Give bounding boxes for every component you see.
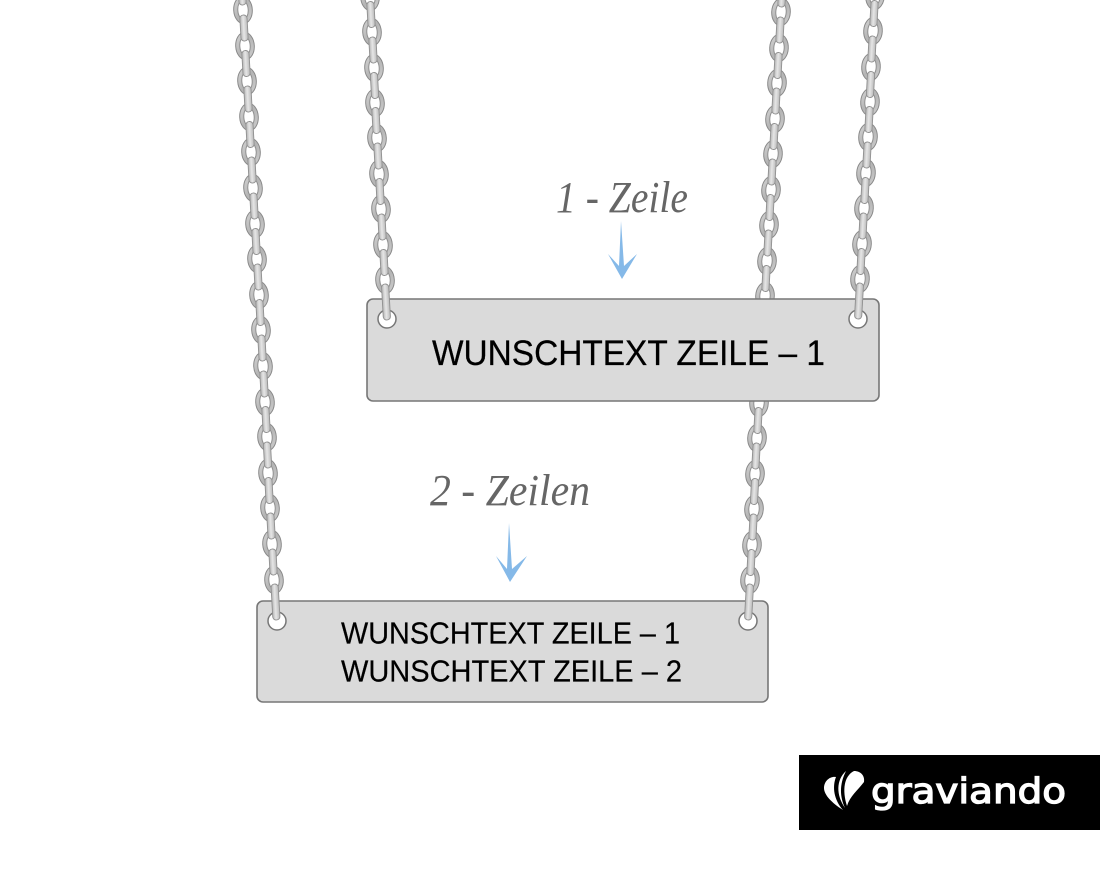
chain: short right strand <box>850 0 885 293</box>
arrow: to two-line pendant <box>496 523 527 582</box>
panel: two-line bar pendant: WUNSCHTEXT ZEILE – 2 <box>341 654 682 688</box>
panel: two-line bar pendant: WUNSCHTEXT ZEILE – 1 <box>341 616 680 650</box>
logo: graviando <box>799 755 1100 830</box>
arrow: to one-line pendant <box>608 221 637 279</box>
chain: short left strand <box>360 0 395 294</box>
panel: two-line bar pendant <box>257 601 768 702</box>
logo: graviando: graviando <box>871 772 1066 812</box>
chain: long left strand <box>233 0 284 594</box>
panel: one-line bar pendant: WUNSCHTEXT ZEILE – 1 <box>432 334 825 373</box>
chain: long right strand <box>740 0 791 594</box>
label: 2 - Zeilen: 2 - Zeilen <box>430 466 590 515</box>
end links through pendant holes <box>271 283 864 620</box>
panel: one-line bar pendant <box>367 299 879 401</box>
label: 1 - Zeile: 1 - Zeile <box>556 173 688 222</box>
